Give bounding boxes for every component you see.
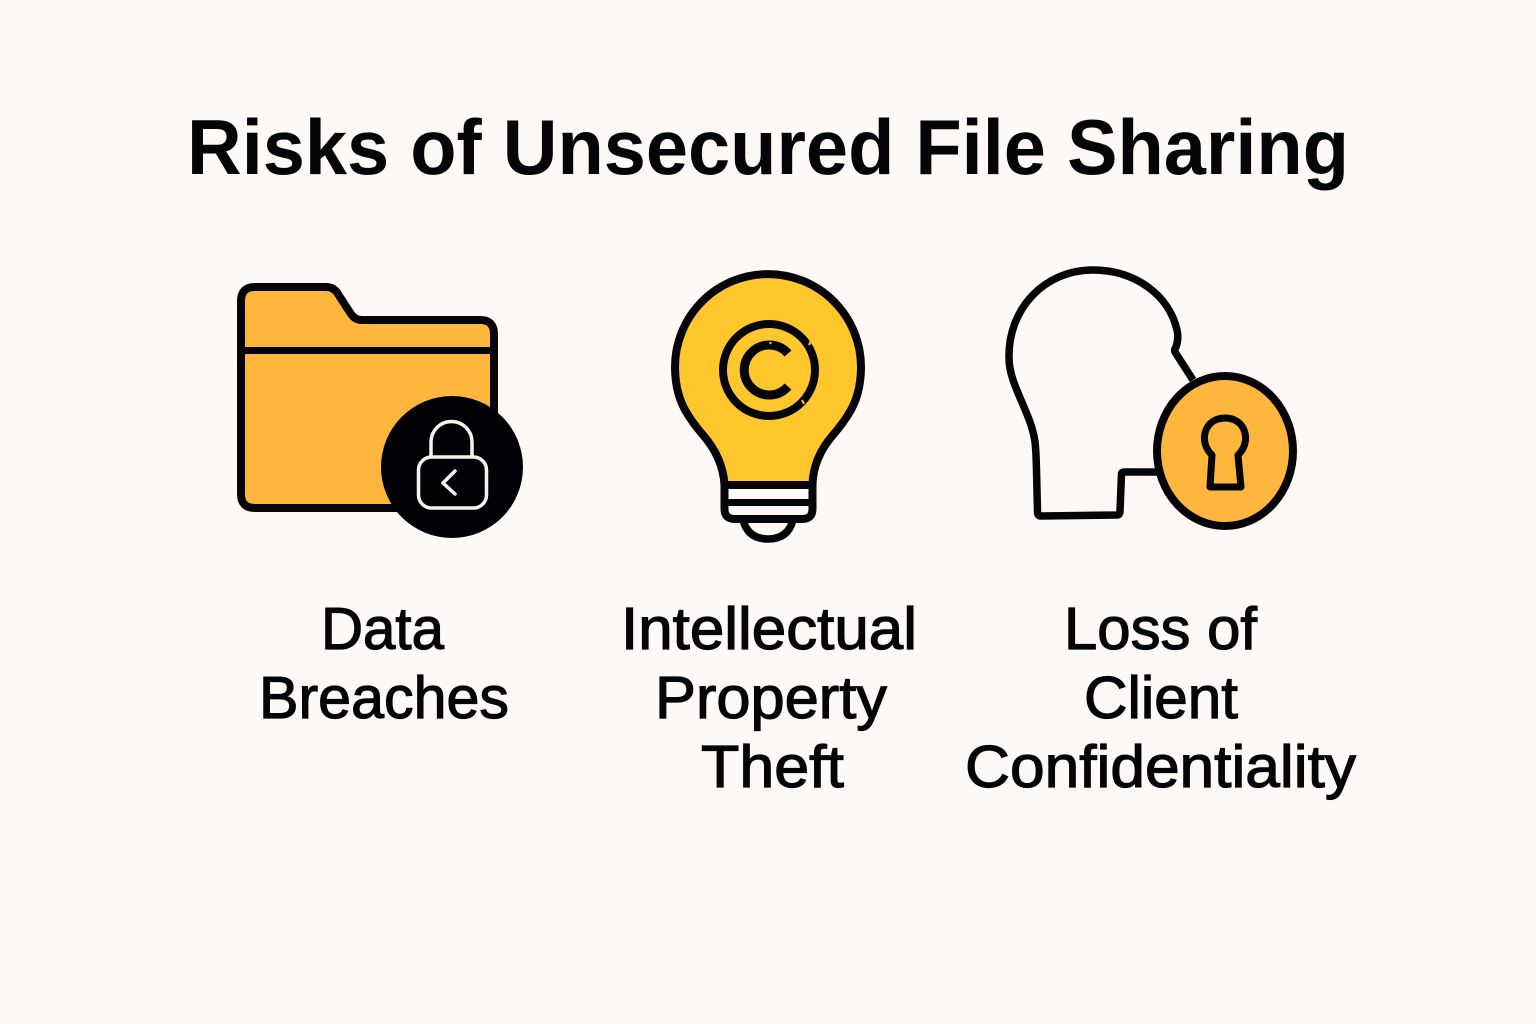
icon: folder with padlock (241, 287, 523, 538)
head outline (1009, 270, 1193, 516)
label: loss of client confidentiality (965, 596, 1357, 800)
title: Risks of Unsecured File Sharing (187, 103, 1349, 191)
label: loss of client confidentiality: Confidentiality (965, 734, 1357, 800)
label: intellectual property theft: Theft (701, 734, 844, 800)
keyhole (1204, 418, 1246, 487)
bulb base (724, 485, 812, 519)
label: intellectual property theft: Property (655, 665, 888, 731)
keyhole badge (1157, 376, 1293, 526)
label: data breaches: Breaches (259, 665, 509, 731)
icon: head silhouette with keyhole (1009, 270, 1293, 526)
label: loss of client confidentiality: Client (1084, 665, 1238, 731)
label: data breaches: Data (321, 596, 444, 662)
label: intellectual property theft: Intellectual (621, 596, 917, 662)
lock badge (381, 396, 523, 538)
label: loss of client confidentiality: Loss of (1064, 596, 1258, 662)
label: intellectual property theft (621, 596, 917, 800)
bulb glass (675, 274, 861, 485)
folder divider (241, 347, 494, 354)
label: data breaches (259, 596, 509, 731)
bulb cap (743, 520, 793, 539)
icon: light bulb with copyright symbol (675, 274, 861, 539)
copyright symbol (723, 324, 815, 416)
folder body (241, 287, 494, 508)
